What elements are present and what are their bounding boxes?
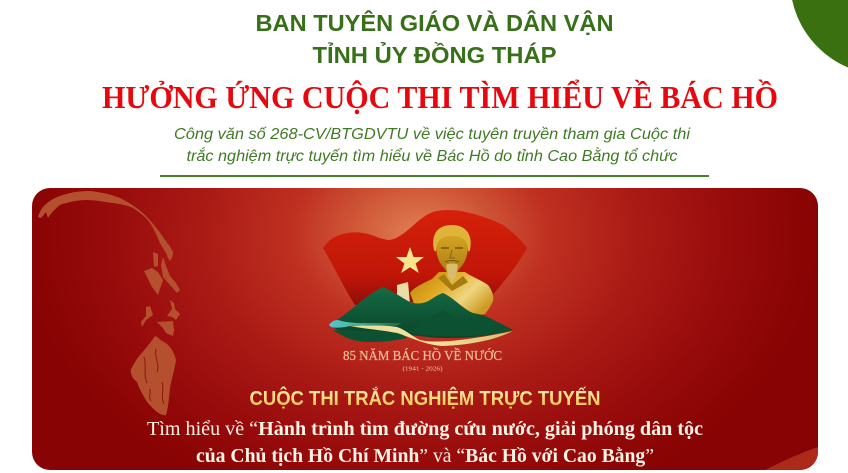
text: contest topic: Tìm hiểu về “Hành trình tìm đường cứu nước, giải phóng dân tộc — [147, 419, 703, 440]
title: red headline: HƯỞNG ỨNG CUỘC THI TÌM HIỂU VỀ BÁC HỒ — [102, 79, 778, 115]
illustration: portrait silhouette — [38, 191, 180, 415]
icon: mountains — [329, 287, 513, 338]
subtitle: official letter: trắc nghiệm trực tuyến tìm hiểu về Bác Hồ do tỉnh Cao Bằng tổ chức — [186, 146, 678, 165]
subtitle: official letter: Công văn số 268-CV/BTGDVTU về việc tuyên truyền tham gia Cuộc thi — [174, 126, 690, 143]
divider line — [160, 175, 709, 177]
text: years: (1941 - 2026) — [402, 366, 442, 372]
heading: contest name: CUỘC THI TRẮC NGHIỆM TRỰC TUYẾN — [250, 386, 600, 410]
icon: monument — [397, 282, 410, 304]
text: contest topic: của Chủ tịch Hồ Chí Minh” và “Bác Hồ với Cao Bằng” — [196, 446, 654, 467]
corner decoration: green circle — [790, 0, 848, 75]
heading: organisation: TỈNH ỦY ĐỒNG THÁP — [312, 40, 556, 68]
icon: flag — [323, 210, 527, 305]
text: contest topic — [147, 419, 703, 467]
icon: bust of Uncle Ho — [410, 225, 493, 318]
heading: organisation — [256, 9, 614, 68]
icon: star — [396, 247, 424, 273]
logo: 85 years emblem — [323, 210, 527, 372]
icon: river — [350, 325, 513, 346]
heading: organisation: BAN TUYÊN GIÁO VÀ DÂN VẬN — [256, 9, 614, 36]
panel: red banner — [32, 188, 818, 470]
subtitle: official letter — [174, 126, 690, 165]
text: anniversary: 85 NĂM BÁC HỒ VỀ NƯỚC — [343, 346, 502, 364]
